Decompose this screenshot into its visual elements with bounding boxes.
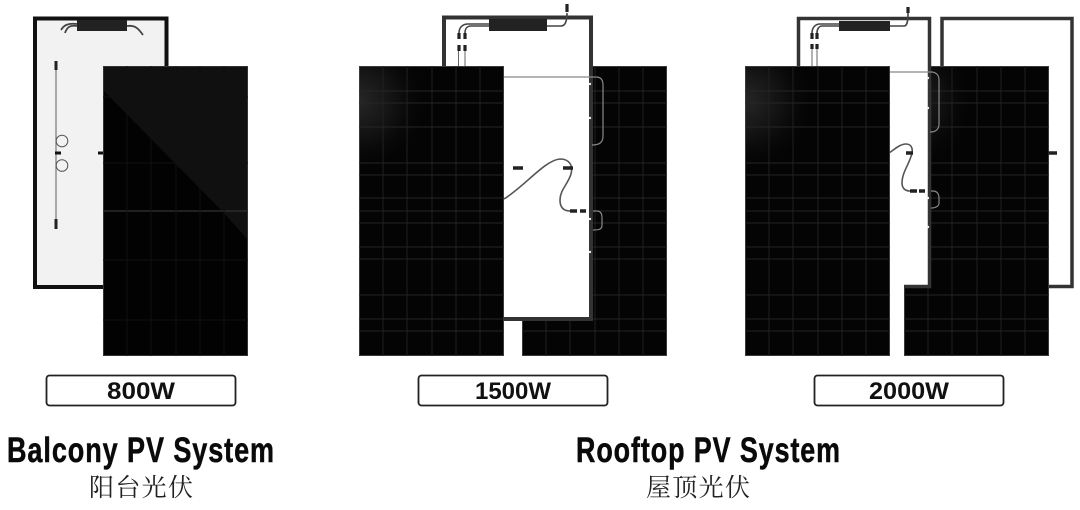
heading: Rooftop PV System: Rooftop PV System [576, 431, 841, 470]
panel: left front module [745, 66, 890, 356]
icon: cable with end connectors [55, 61, 103, 229]
panel: back of module with white frame [444, 18, 591, 319]
panel: right front module [904, 66, 1049, 356]
subheading: balcony PV in Chinese: 阳台光伏 [89, 474, 193, 502]
group: balcony PV 800W panels [35, 18, 248, 356]
group: rooftop PV 1500W panels [359, 4, 667, 356]
panel: first back module [798, 18, 930, 286]
label: 1500W [418, 376, 608, 406]
panel: back of balcony module [35, 18, 166, 287]
icon: junction box and cables [812, 7, 908, 66]
heading: Balcony PV System: Balcony PV System [7, 431, 275, 470]
icon: junction box and cables [61, 20, 143, 35]
icon: connecting cables on frame [504, 77, 603, 253]
label: 2000W [814, 376, 1004, 406]
panel: second back module [942, 18, 1072, 286]
label: 1500W: 1500W [475, 378, 551, 405]
subheading: rooftop PV in Chinese: 屋顶光伏 [646, 474, 750, 502]
panel: right front module [522, 66, 667, 356]
label: 2000W: 2000W [869, 378, 949, 405]
group: rooftop PV 2000W panels [745, 7, 1072, 356]
icon: connecting cables on frame [889, 72, 1057, 228]
panel: left front module [359, 66, 504, 356]
label: 800W: 800W [107, 378, 175, 405]
panel: front of balcony module [103, 66, 248, 356]
label: 800W [46, 376, 236, 406]
icon: junction box and cables [458, 4, 567, 66]
